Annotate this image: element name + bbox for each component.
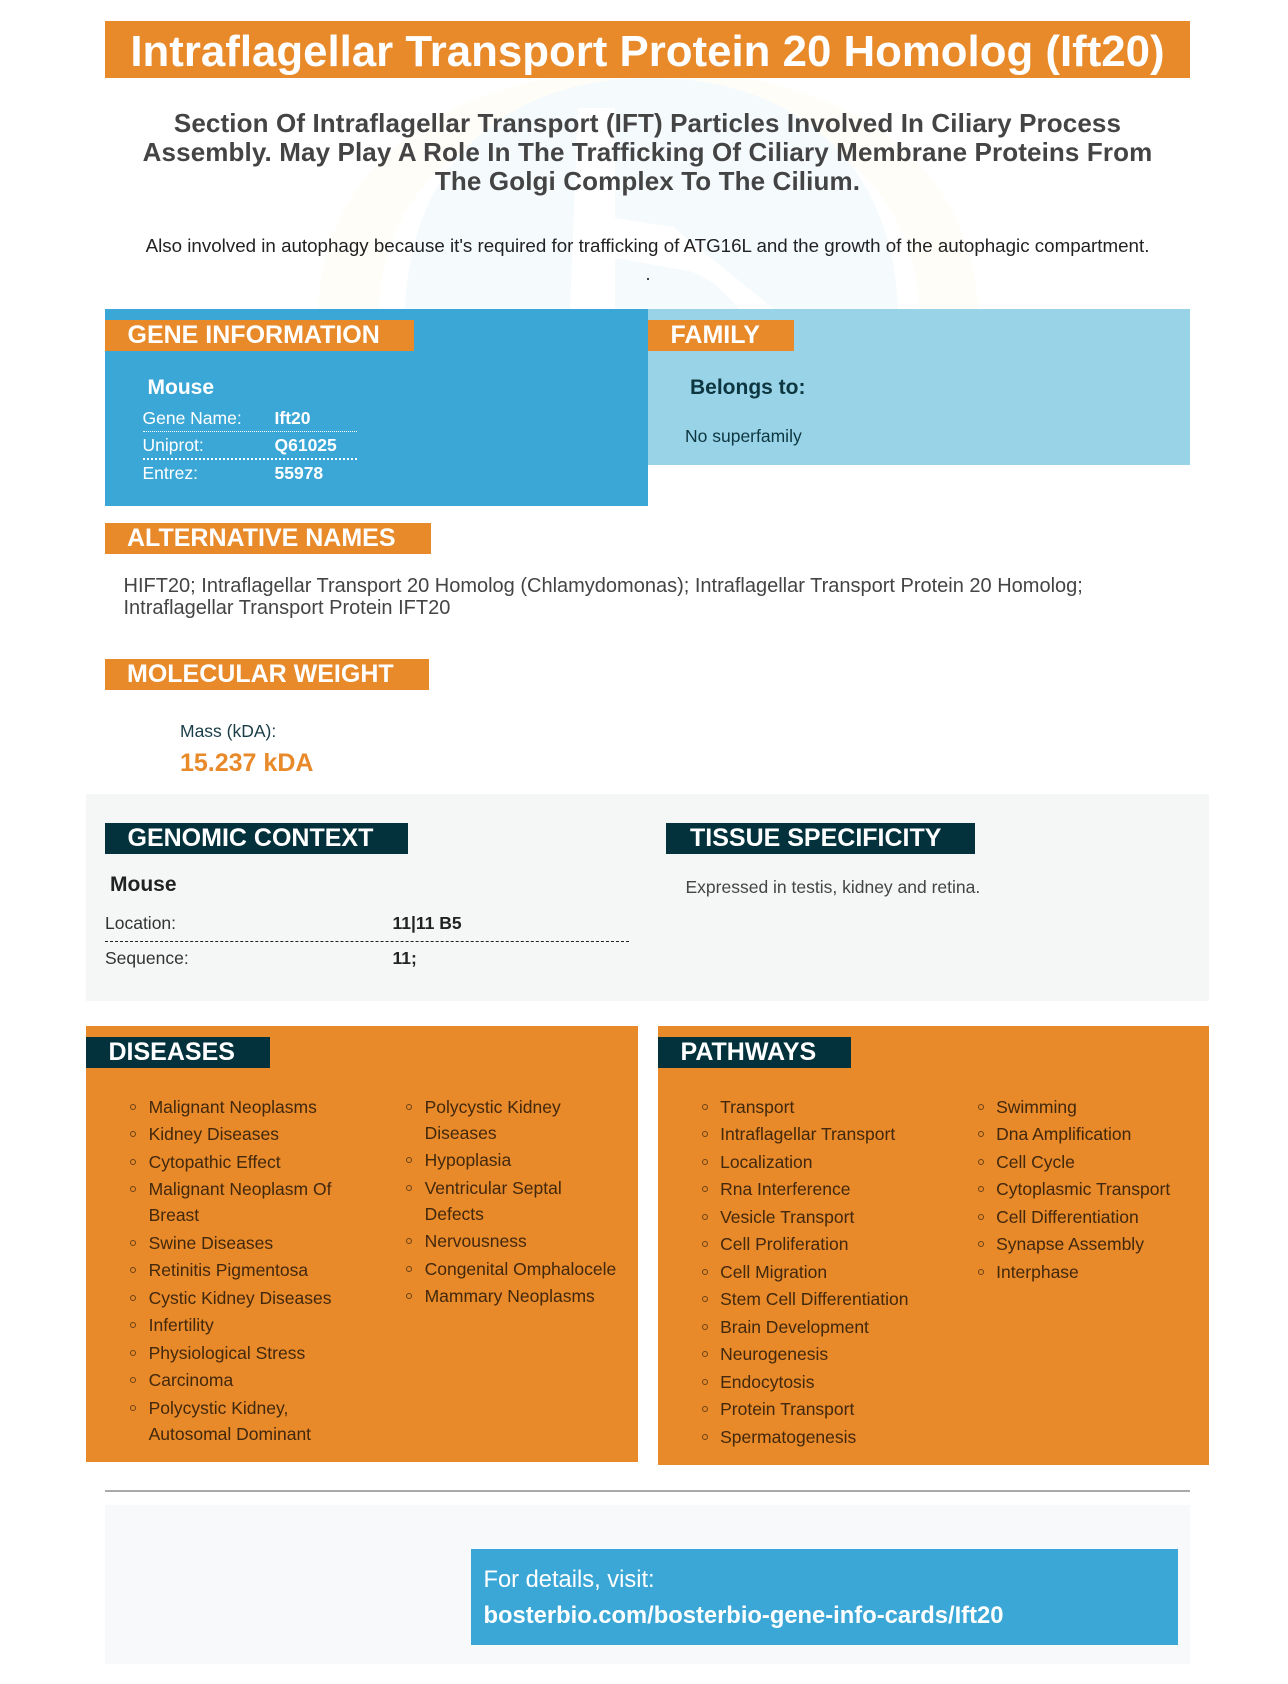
value: Q61025 xyxy=(274,435,337,455)
diseases list column 1 xyxy=(130,1097,332,1444)
pathways list column 2: Dna Amplification xyxy=(996,1124,1131,1144)
pathways list column 2: Synapse Assembly xyxy=(996,1234,1144,1254)
diseases list column 1: Infertility xyxy=(149,1315,214,1335)
diseases list column 1: Autosomal Dominant xyxy=(149,1424,311,1444)
heading: pathways: PATHWAYS xyxy=(680,1038,816,1066)
row: entrez xyxy=(142,463,323,483)
diseases list column 2: Polycystic Kidney xyxy=(425,1097,561,1117)
panel: diseases xyxy=(86,1026,638,1462)
pathways list column 2: Interphase xyxy=(996,1262,1079,1282)
subtitle description xyxy=(143,108,1152,196)
pathways list column 1: Brain Development xyxy=(720,1317,869,1337)
pathways list column 1: Vesicle Transport xyxy=(720,1207,854,1227)
label: Sequence: xyxy=(105,948,189,968)
value: 11|11 B5 xyxy=(392,913,462,933)
pathways list column 1: Stem Cell Differentiation xyxy=(720,1289,908,1309)
diseases list column 1: Cystic Kidney Diseases xyxy=(149,1288,331,1308)
diseases list column 1: Physiological Stress xyxy=(149,1343,305,1363)
heading: genomic context: GENOMIC CONTEXT xyxy=(128,824,373,852)
diseases list column 1: Polycystic Kidney, xyxy=(149,1398,288,1418)
value: Ift20 xyxy=(274,408,310,428)
pathways list column 1: Cell Proliferation xyxy=(720,1234,848,1254)
pathways list column 2 xyxy=(978,1097,1170,1282)
family value: No superfamily xyxy=(685,426,802,446)
location row xyxy=(105,911,629,942)
diseases list column 2: Hypoplasia xyxy=(425,1150,511,1170)
heading: pathways xyxy=(658,1037,851,1068)
pathways list column 2: Cell Differentiation xyxy=(996,1207,1139,1227)
heading: diseases xyxy=(86,1037,270,1068)
subtitle description: Section Of Intraflagellar Transport (IFT) Particles Involved In Ciliary Process xyxy=(174,108,1121,138)
diseases list column 1: Kidney Diseases xyxy=(149,1124,279,1144)
label: Entrez: xyxy=(142,463,198,483)
diseases list column 2: Nervousness xyxy=(425,1231,527,1251)
heading: tissue specificity: TISSUE SPECIFICITY xyxy=(690,824,941,852)
pathways list column 2: Cytoplasmic Transport xyxy=(996,1179,1170,1199)
diseases list column 2 xyxy=(406,1097,616,1306)
subtitle description: Assembly. May Play A Role In The Trafficking Of Ciliary Membrane Proteins From xyxy=(143,137,1152,167)
diseases list column 2: Congenital Omphalocele xyxy=(425,1259,616,1279)
tissue specificity text: Expressed in testis, kidney and retina. xyxy=(686,877,980,897)
diseases list column 1: Malignant Neoplasms xyxy=(149,1097,317,1117)
panel: family xyxy=(648,309,1190,465)
label: Location: xyxy=(105,913,176,933)
panel: pathways xyxy=(658,1026,1209,1465)
title banner: Intraflagellar Transport Protein 20 Homolog (Ift20) xyxy=(130,27,1165,76)
pathways list column 1: Transport xyxy=(720,1097,794,1117)
row: gene name xyxy=(143,406,357,432)
autophagy note: Also involved in autophagy because it's required for trafficking of ATG16L and the growth of the autophagic compartment. xyxy=(146,235,1149,256)
period line: . xyxy=(645,264,650,284)
species: mouse: Mouse xyxy=(148,376,214,399)
heading: family xyxy=(648,320,794,351)
heading: gene information: GENE INFORMATION xyxy=(128,321,380,349)
pathways list column 1: Spermatogenesis xyxy=(720,1427,856,1447)
belongs to label: Belongs to: xyxy=(690,376,806,399)
diseases list column 1: Cytopathic Effect xyxy=(149,1152,281,1172)
mass value: 15.237 kDA xyxy=(180,749,313,777)
diseases list column 2: Diseases xyxy=(425,1123,497,1143)
diseases list column 2: Ventricular Septal xyxy=(425,1178,562,1198)
panel: gene information xyxy=(105,309,648,506)
heading: alternative names: ALTERNATIVE NAMES xyxy=(127,524,396,552)
diseases list column 1: Retinitis Pigmentosa xyxy=(149,1260,308,1280)
diseases list column 1: Breast xyxy=(149,1205,199,1225)
diseases list column 1: Malignant Neoplasm Of xyxy=(149,1179,331,1199)
alternative names text: Intraflagellar Transport Protein IFT20 xyxy=(124,597,450,619)
diseases list column 1: Carcinoma xyxy=(149,1370,233,1390)
pathways list column 1: Localization xyxy=(720,1152,813,1172)
url: bosterbio.com/bosterbio-gene-info-cards/Ift20 xyxy=(484,1602,1003,1629)
pathways list column 1: Cell Migration xyxy=(720,1262,827,1282)
pathways list column 2: Swimming xyxy=(996,1097,1077,1117)
pathways list column 1: Intraflagellar Transport xyxy=(720,1124,895,1144)
panel: footer xyxy=(105,1505,1190,1664)
value: 55978 xyxy=(274,463,323,483)
label: Gene Name: xyxy=(142,408,242,428)
diseases list column 1: Swine Diseases xyxy=(149,1233,273,1253)
pathways list column 2: Cell Cycle xyxy=(996,1152,1075,1172)
pathways list column 1 xyxy=(702,1097,908,1447)
pathways list column 1: Protein Transport xyxy=(720,1399,854,1419)
pathways list column 1: Neurogenesis xyxy=(720,1344,828,1364)
heading: diseases: DISEASES xyxy=(108,1038,235,1066)
sequence row xyxy=(105,948,417,968)
mass label: Mass (kDA): xyxy=(180,721,276,741)
heading: molecular weight: MOLECULAR WEIGHT xyxy=(127,660,394,688)
diseases list column 2: Defects xyxy=(425,1204,484,1224)
heading: family: FAMILY xyxy=(670,321,760,349)
label: Uniprot: xyxy=(142,435,204,455)
pathways list column 1: Endocytosis xyxy=(720,1372,814,1392)
panel: genomic context and tissue specificity xyxy=(86,794,1209,1001)
row: uniprot xyxy=(143,433,357,460)
visit label: For details, visit: xyxy=(484,1567,655,1593)
callout: details link xyxy=(471,1549,1178,1645)
subtitle description: The Golgi Complex To The Cilium. xyxy=(435,166,860,196)
species: mouse: Mouse xyxy=(110,873,177,896)
value: 11; xyxy=(392,948,417,968)
background watermark logo xyxy=(406,78,898,309)
diseases list column 2: Mammary Neoplasms xyxy=(425,1286,595,1306)
alternative names text xyxy=(124,575,1083,619)
pathways list column 1: Rna Interference xyxy=(720,1179,850,1199)
alternative names text: HIFT20; Intraflagellar Transport 20 Homolog (Chlamydomonas); Intraflagellar Transport Protein 20 Homolog; xyxy=(124,575,1083,597)
